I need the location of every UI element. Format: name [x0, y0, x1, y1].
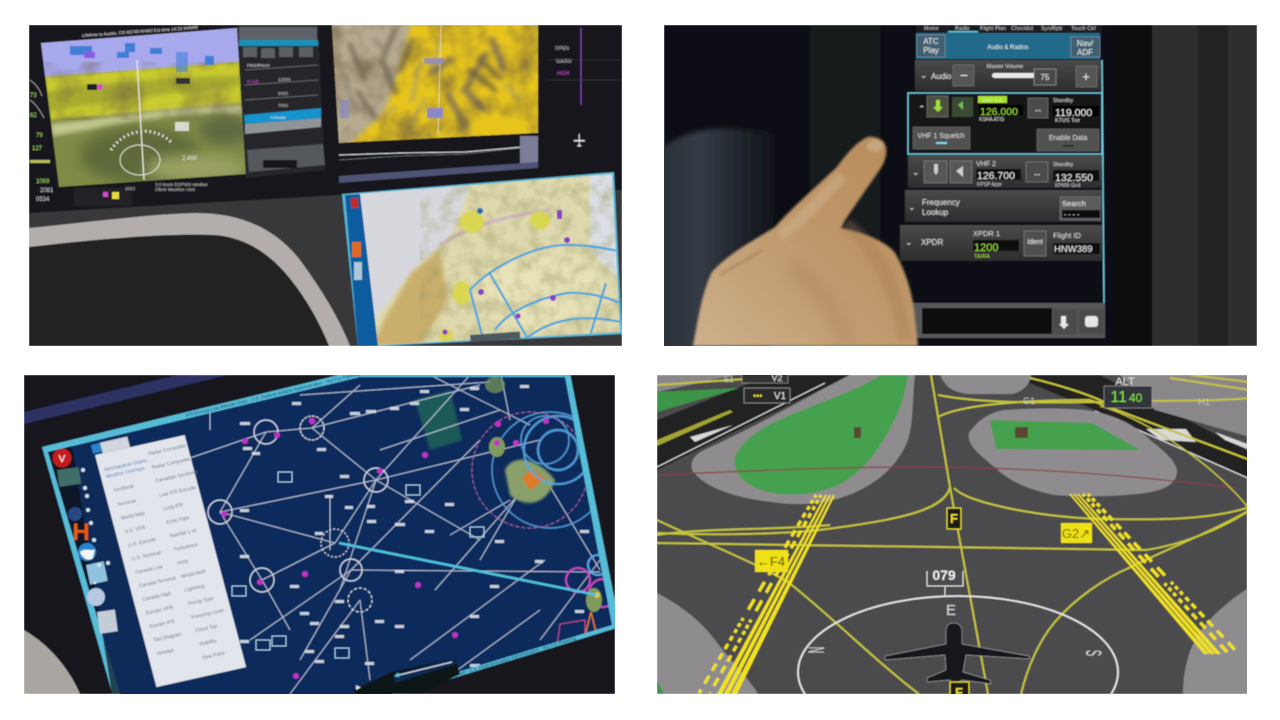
transponder row: ⌄ [905, 237, 913, 247]
radio header: Play [923, 46, 939, 55]
runway V-speed tag [724, 372, 790, 403]
runway V-speed tag: V1 [774, 391, 787, 402]
VHF 1 row: KTUS Twr [1055, 118, 1080, 124]
photo: cockpit multi-function displays: Lifetime to Austin, CO 80749 KHMJ Est time 14:32 KHMW [82, 25, 199, 38]
VHF 2 row: KPSP Appr [977, 182, 1002, 188]
flight plan panel [237, 25, 325, 178]
white layers menu: Canadian Sectional [155, 469, 199, 484]
tablet top tabs [916, 25, 1102, 33]
audio row: Audio [931, 72, 952, 81]
white layers menu: U.S. Enroute [128, 537, 157, 549]
runway V-speed tag: E1 [724, 375, 734, 384]
flight plan panel: 7000 [278, 103, 289, 108]
left instrument readouts: 127 [32, 146, 43, 152]
right grass island [940, 375, 1177, 496]
white layers menu: Weather Overlays [105, 465, 146, 480]
lower corner islands [657, 587, 1250, 694]
VHF 1 row: ↔ [1034, 104, 1042, 114]
left instrument readouts: 1069 [36, 179, 50, 185]
tablet border and bottom bar [905, 60, 1105, 338]
seat [660, 129, 772, 350]
frequency lookup row: Lookup [922, 208, 949, 217]
frequency lookup row: ⌄ [908, 202, 916, 212]
taxiway sign F4 [755, 550, 788, 572]
taxiway sign G2 [1061, 523, 1092, 543]
altitude tag: ALT [1115, 376, 1135, 388]
status strip under display: 3.0 knots EGPWS window [155, 182, 208, 187]
altitude tag: 11 [1110, 389, 1127, 406]
photo: cockpit multi-function displays [29, 20, 625, 350]
white layers menu: Europe IFR [149, 619, 176, 630]
white layers menu: Rainfall 1 Hr [170, 528, 198, 539]
left app dock: H [72, 519, 90, 546]
sectional chart touchscreen [340, 170, 625, 350]
transponder row: XPDR 1 [973, 229, 1000, 238]
photo: pilot touching radio tablet [660, 25, 1257, 350]
audio row: ⌄ [920, 70, 928, 80]
airways [190, 370, 600, 694]
cyan route [339, 543, 597, 595]
white layers menu: U.S. VFR [124, 525, 146, 535]
transponder row: TA/RA [974, 254, 990, 260]
white layers menu: Radar Composite [148, 443, 187, 457]
VHF 1 row [908, 93, 1102, 154]
white layers menu: Canada High [142, 591, 172, 603]
transponder row: Flight ID [1053, 231, 1082, 240]
status strip under display: 1013 [125, 186, 136, 191]
tablet top tabs: Home [924, 26, 939, 32]
left instrument readouts: 62 [30, 113, 37, 119]
radio header: Nav/ [1077, 39, 1094, 48]
VHF 2 row: Standby [1053, 162, 1073, 168]
white layers menu: Visibility [198, 638, 218, 648]
heading compass rose: N [803, 647, 829, 653]
VHF 2 row: ⌄ [912, 167, 920, 177]
tablet top tabs: Flight Plan [980, 26, 1006, 32]
transponder row: Ident [1027, 239, 1043, 246]
taxiway labels: G1 [1023, 396, 1035, 406]
engine and fuel panel: WARM [556, 59, 572, 65]
white layers menu: Airways [156, 647, 175, 657]
white layers menu: World Map [120, 511, 146, 522]
altitude tag: 40 [1129, 391, 1143, 405]
VHF 2 row [908, 155, 1102, 189]
radio header: Audio & Radios [987, 45, 1029, 51]
VHF 2 row: 132.550 [1055, 172, 1093, 184]
white layers menu: Cloud Top [195, 624, 218, 634]
altitude tag [1104, 376, 1152, 408]
frequency lookup row: Search [1062, 199, 1086, 208]
VHF 2 row: 126.700 [977, 170, 1015, 182]
left instrument readouts: 79 [36, 133, 43, 139]
tablet top tabs: Checklist [1011, 26, 1034, 32]
VHF 1 row: Standby [1053, 98, 1073, 104]
white layers menu: Radar Composite [151, 457, 191, 471]
class airspace cluster [470, 376, 591, 530]
taxiway labels [1023, 396, 1210, 407]
right hold-short bars [1069, 494, 1238, 654]
flight labels [70, 43, 214, 72]
VHF 2 row: VHF 2 [976, 161, 996, 168]
transponder row: XPDR [921, 238, 943, 247]
VHF 2 row: ↔ [1032, 168, 1042, 178]
left instrument readouts: 2081 [40, 188, 54, 194]
white layers menu: Icing [177, 558, 189, 567]
white layers menu: Echo Tops [166, 515, 191, 526]
status strip under display [74, 182, 208, 206]
frequency lookup row: - - - - [1064, 212, 1080, 219]
engine and fuel panel [548, 28, 620, 146]
bottom chart strip: IFR Enroute Low Altitude Chart - U.S. Federal Aviation Administration - Not For Planning [404, 636, 577, 693]
white layers menu: Europe VFR [146, 605, 174, 616]
fix labels [240, 385, 589, 667]
VHF 1 row: ⌃ [918, 104, 926, 114]
timeline scrubber [353, 658, 460, 694]
heading compass rose: S [1081, 650, 1107, 656]
taxiway labels: H1 [1198, 397, 1210, 407]
VHF 1 row: Enable Data [1049, 135, 1087, 142]
audio row [915, 60, 1101, 91]
heading compass rose: 079 [932, 567, 956, 583]
left instrument readouts: 73 [30, 93, 37, 99]
photo: synthetic vision airport taxiway view [657, 372, 1250, 720]
audio row: − [960, 67, 968, 83]
audio row: 75 [1041, 73, 1050, 82]
white layers menu: Sectional [113, 483, 135, 494]
white layers menu: Canada Terminal [138, 575, 177, 589]
left instrument readouts [30, 80, 54, 203]
terrain moving map [331, 25, 539, 144]
VHF 1 row: 126.000 [980, 106, 1018, 118]
taxiway sign lower F: F [955, 685, 963, 700]
left hold-short bars [699, 495, 835, 694]
frequency lookup row [905, 190, 1102, 222]
flight plan panel: Activate [270, 115, 287, 120]
audio row: + [1082, 69, 1090, 84]
photo: IFR enroute chart touchscreen [24, 370, 620, 700]
status strip under display: Climb Weather Alert [155, 187, 196, 192]
white layers menu [92, 424, 249, 687]
minimum altitude boxes [232, 472, 484, 658]
vertical profile strip [339, 133, 538, 183]
radio header: ADF [1077, 48, 1093, 57]
destination airspace [556, 553, 610, 642]
ownship aircraft [885, 623, 1030, 685]
flight plan panel: 9000 [278, 91, 289, 96]
window frame [29, 213, 350, 346]
left app dock: V [59, 454, 66, 465]
white layers menu: Winds Aloft [180, 569, 207, 580]
taxiway sign lower F [950, 682, 969, 700]
primary flight display: 2,400 [182, 156, 198, 162]
magenta-red boundary line [662, 467, 1235, 488]
white layers menu: Lightning [184, 583, 205, 594]
left instrument readouts: 0534 [36, 197, 50, 203]
white layers menu: Terminal [117, 498, 137, 508]
left app dock [48, 442, 121, 694]
taxiway centerlines [657, 375, 1250, 694]
taxiway sign F4: ←F4 [757, 554, 785, 569]
white layers menu: Low IFR Enroute [159, 485, 197, 499]
taxiway sign F [947, 508, 961, 529]
heading compass rose: E [946, 602, 956, 619]
tablet top tabs: Syn/Rptr [1041, 26, 1063, 32]
tablet top tabs: Radio [955, 26, 969, 32]
engine and fuel panel: HIGH [557, 71, 570, 77]
white layers menu: Canada Low [135, 564, 164, 576]
audio row: Master Volume [987, 64, 1023, 70]
transponder row: 1200 [974, 242, 998, 254]
white layers menu: Aeronautical Charts [103, 458, 148, 473]
VHF 2 row: KPMR Gnd [1055, 183, 1081, 189]
flight plan panel: 12000 [278, 77, 291, 82]
transponder row [900, 225, 1102, 261]
runway V-speed tag: ••• [753, 391, 762, 401]
VHF 1 row: 119.000 [1055, 107, 1092, 119]
white layers menu: Turbulence [173, 542, 199, 553]
attitude arc [111, 131, 172, 150]
radio header: ATC [923, 37, 939, 46]
radio header [916, 33, 1100, 59]
frequency lookup row: Frequency [922, 198, 960, 207]
taxiway sign F: F [950, 511, 958, 526]
top title strip: IFR Enroute Low Altitude Chart - U.S. Federal Aviation Administration - Not For Planning [185, 371, 361, 418]
runway V-speed tag: V2 [771, 373, 783, 383]
runway bands [657, 375, 1250, 480]
left grass island [692, 375, 915, 504]
VHF 1 row: KSHA ATIS [979, 117, 1005, 123]
engine and fuel panel: OPEN [555, 46, 570, 52]
flight plan panel: KASE [247, 79, 259, 84]
white layers menu: Taxi Diagram [153, 631, 183, 644]
VHF 1 row: VHF 1 A [982, 98, 1003, 104]
white layers menu: U.S. Terminal [131, 550, 162, 562]
chart map [40, 370, 620, 700]
primary flight display [40, 27, 246, 188]
airport markers [221, 418, 549, 679]
white layers menu: Dew Point [202, 650, 226, 661]
navaid rings [208, 416, 388, 612]
flight plan panel: FMS/RNAV [247, 63, 270, 68]
white layers menu: Freezing Level [191, 608, 224, 621]
taxiway sign G2: G2↗ [1062, 526, 1090, 541]
white layers menu: Long IFR [162, 502, 184, 512]
heading compass rose [798, 567, 1118, 720]
transponder row: HNW389 [1054, 244, 1093, 255]
tablet top tabs: Touch Ctrl [1071, 26, 1096, 32]
hand [693, 137, 918, 346]
VHF 1 row: VHF 1 Squelch [917, 133, 965, 140]
white layers menu: Precip Type [187, 596, 215, 607]
